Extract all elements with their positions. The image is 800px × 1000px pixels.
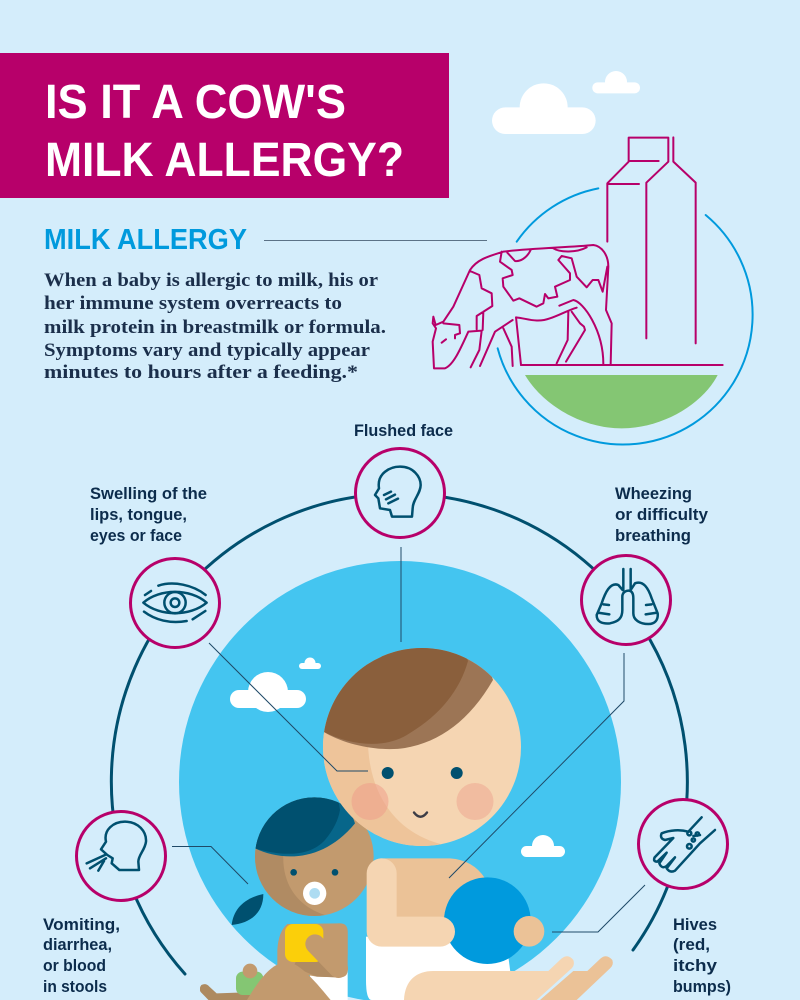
eyes [382, 767, 394, 779]
symptom ring [111, 494, 687, 974]
intro text block: milk protein in breastmilk or formula. [44, 317, 386, 338]
baby arm [315, 944, 338, 968]
label: hives: itchy [673, 956, 718, 975]
torso [380, 858, 485, 922]
milk carton [607, 137, 696, 343]
icon: cow and milk carton illustration [433, 71, 753, 445]
label: swelling: lips, tongue, [90, 505, 187, 524]
diaper [366, 937, 514, 1000]
sky clouds [492, 71, 640, 134]
icon: hives hand [638, 800, 728, 888]
baby diaper [310, 970, 348, 1000]
mother's body illustration [366, 858, 613, 1000]
intro text block [44, 270, 386, 383]
pointer lines [172, 547, 645, 932]
cow [433, 245, 612, 368]
title banner: IS IT A COW'S [45, 76, 346, 129]
ground line [521, 362, 723, 368]
label: wheezing [615, 484, 709, 545]
icon: lungs [582, 556, 670, 644]
label: vomiting: in stools [43, 977, 107, 996]
intro text block: her immune system overreacts to [44, 293, 342, 314]
back hand [540, 956, 613, 1000]
baby leg [247, 964, 330, 1000]
label: swelling [90, 484, 207, 545]
label: flushed face: Flushed face [354, 421, 453, 440]
face shape with hair [320, 640, 525, 850]
label: hives [673, 915, 731, 996]
baby's hand circle [514, 916, 544, 947]
smile [414, 812, 427, 817]
ball [444, 877, 531, 964]
icon: eye [130, 558, 220, 648]
large blue circle [179, 561, 621, 1000]
baby curl [232, 894, 263, 925]
label: vomiting: or blood [43, 956, 106, 975]
green toy [236, 964, 263, 995]
baby torso [277, 923, 348, 977]
heading: milk allergy: MILK ALLERGY [44, 224, 247, 256]
baby illustration [200, 790, 377, 1000]
green milk bowl [525, 375, 718, 428]
title banner [0, 53, 449, 198]
label: vomiting [43, 915, 120, 996]
intro text block: minutes to hours after a feeding.* [44, 362, 358, 383]
intro text block: When a baby is allergic to milk, his or [44, 270, 379, 291]
label: wheezing: Wheezing [615, 484, 692, 503]
label: hives: Hives [673, 915, 717, 934]
clouds inside circle [230, 658, 565, 857]
title banner: MILK ALLERGY? [45, 134, 404, 187]
icon: flushed face [356, 448, 444, 538]
label: wheezing: breathing [615, 526, 691, 545]
label: vomiting: Vomiting, [43, 915, 120, 934]
mother's face illustration [320, 640, 525, 850]
arm [382, 873, 440, 932]
label: wheezing: or difficulty [615, 505, 709, 524]
baby eyes [290, 869, 338, 876]
front hand [404, 956, 574, 1000]
blue circle arcs [498, 188, 753, 445]
label: swelling: Swelling of the [90, 484, 207, 503]
label: hives: (red, [673, 935, 710, 954]
baby foot [200, 984, 250, 1000]
pacifier [303, 882, 326, 905]
icon: vomiting head [76, 812, 166, 900]
label: hives: bumps) [673, 977, 731, 996]
cheeks [352, 783, 388, 820]
toy block [285, 924, 323, 962]
baby head [254, 797, 374, 916]
label: vomiting: diarrhea, [43, 935, 112, 954]
label: swelling: eyes or face [90, 526, 182, 545]
intro text block: Symptoms vary and typically appear [44, 340, 371, 361]
